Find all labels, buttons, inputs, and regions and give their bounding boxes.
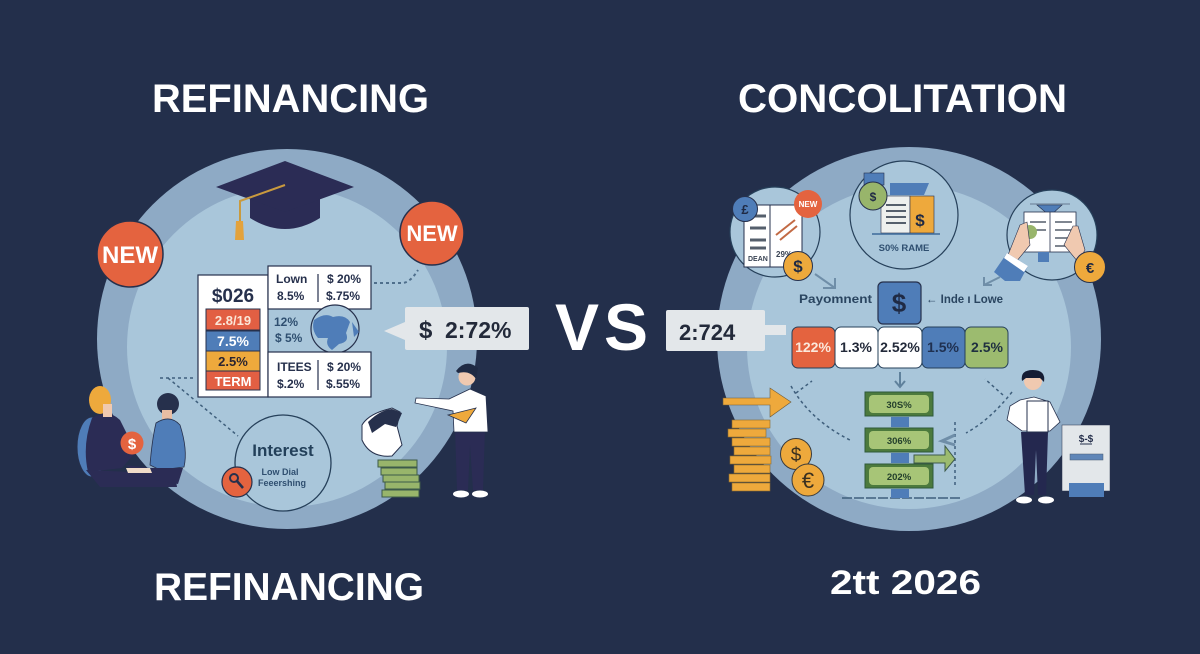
text: payment label: Payomnent: [799, 292, 872, 306]
rate cells row: [792, 327, 1008, 368]
table cell: loan: [268, 266, 371, 309]
badge: new left: NEW: [102, 242, 158, 269]
icon: interest circle: Feeershing: [258, 478, 306, 488]
panel: consolidation circle: [717, 147, 1110, 531]
title: consolidation: CONCOLITATION: [738, 77, 1067, 121]
table cell: total column: [198, 275, 268, 397]
icon: interest circle: Low Dial: [261, 467, 299, 477]
table cell: total column: 7.5%: [217, 333, 250, 349]
callout: right rate: [666, 310, 786, 351]
icon: document circle centre: $: [870, 190, 877, 204]
bill: top: 30S%: [886, 400, 912, 411]
table cell: total column: TERM: [215, 374, 251, 389]
icon: interest circle: Interest: [252, 441, 314, 460]
icon: cash stack: [378, 460, 420, 497]
badge: new right: NEW: [406, 221, 458, 246]
callout: left rate: [384, 307, 529, 350]
rate cell: white one: [835, 327, 878, 368]
icon: document circle centre: S0% RAME: [879, 243, 929, 254]
title: refinancing: REFINANCING: [152, 77, 429, 121]
callout: left rate: $: [419, 317, 433, 344]
icon: document circle left: £: [741, 202, 749, 217]
table cell: loan: Lown: [276, 272, 307, 286]
callout: left rate: 2:72%: [445, 317, 511, 343]
icon: document circle centre: [850, 161, 958, 269]
rate cell: red: [792, 327, 835, 368]
table cell: middle rates: [274, 315, 303, 345]
icon: dollar coin: $: [791, 445, 802, 466]
footer: refinancing: REFINANCING: [154, 566, 424, 609]
icon: document circle left: $: [793, 257, 803, 276]
callout: right rate: 2:724: [679, 320, 736, 345]
icon: document circle left: [730, 187, 822, 280]
people: couple with coin: [77, 386, 185, 487]
table cell: middle rates: $ 5%: [275, 331, 303, 345]
text: index label: ← Inde ı Lowe: [926, 292, 1003, 306]
table cell: items: $.2%: [277, 377, 305, 391]
arrow: green: [914, 446, 955, 471]
table cell: loan: 8.5%: [277, 289, 305, 303]
icon: dollar coin: [780, 438, 812, 470]
arrow: left document to payment: [815, 274, 835, 288]
icon: dollar coin: $: [128, 436, 137, 453]
table cell: items: $.55%: [326, 377, 360, 391]
person: man with paper: [1007, 370, 1060, 504]
rate cell: green: 2.5%: [971, 339, 1004, 355]
icon: document circle right: €: [1086, 260, 1095, 277]
rate cell: red: 122%: [795, 339, 831, 355]
table cell: items: [268, 352, 371, 397]
rate cell: white one: 1.3%: [840, 339, 873, 355]
rate cell: green: [965, 327, 1008, 368]
table cell: loan: $ 20%: [327, 272, 361, 286]
icon: document circle centre: $: [915, 211, 925, 230]
icon: dollar box: $: [892, 288, 907, 318]
rate cell: blue: [922, 327, 965, 368]
arrow: orange: [723, 388, 791, 417]
icon: document circle left: NEW: [799, 200, 818, 209]
arrows: dotted flows: [791, 379, 1012, 498]
arrow: right document to index: [984, 277, 1000, 285]
badge: new right: [400, 201, 464, 265]
bill: middle: 306%: [887, 436, 912, 447]
arrow: table to new badge: [374, 270, 418, 283]
table cell: loan: $.75%: [326, 289, 360, 303]
icon: euro coin: €: [802, 468, 814, 493]
table cell: total column: $026: [212, 286, 254, 307]
table cell: items: ITEES: [277, 360, 312, 374]
footer: year: 2tt 2026: [830, 564, 981, 602]
icon: machine: [1062, 425, 1110, 497]
icon: money stack: [865, 392, 933, 498]
icon: euro coin: [792, 464, 824, 496]
person: presenter: [415, 364, 488, 498]
badge: new left: [97, 221, 163, 287]
icon: interest circle: [222, 415, 331, 511]
table cell: middle rates: 12%: [274, 315, 298, 329]
icon: orange coin stack: [728, 420, 771, 491]
icon: dollar box: [878, 282, 921, 324]
bill: bottom: 202%: [887, 472, 912, 483]
icon: document circle right: [994, 190, 1106, 282]
rate cell: white two: 2.52%: [880, 339, 920, 355]
table: rates: [198, 266, 371, 397]
icon: document circle left: DEAN: [748, 256, 768, 263]
icon: document circle left: 29%: [776, 250, 792, 259]
rate cell: white two: [878, 327, 922, 368]
arrow: blue pointing left: [942, 435, 955, 445]
table cell: items: $ 20%: [327, 360, 361, 374]
table cell: total column: 2.8/19: [215, 313, 251, 328]
table cell: total column: 2.5%: [218, 354, 248, 369]
panel: refinancing circle: [77, 149, 488, 529]
rate cell: blue: 1.5%: [927, 339, 960, 355]
icon: graduation cap: [216, 161, 354, 240]
icon: globe: [311, 305, 359, 353]
icon: machine: $-$: [1079, 434, 1094, 445]
arrow: table to interest circle: [160, 378, 238, 436]
icon: white creature with arrow: [362, 408, 402, 456]
heading: versus: VS: [555, 290, 648, 364]
arrow: cells to money: [895, 372, 905, 387]
